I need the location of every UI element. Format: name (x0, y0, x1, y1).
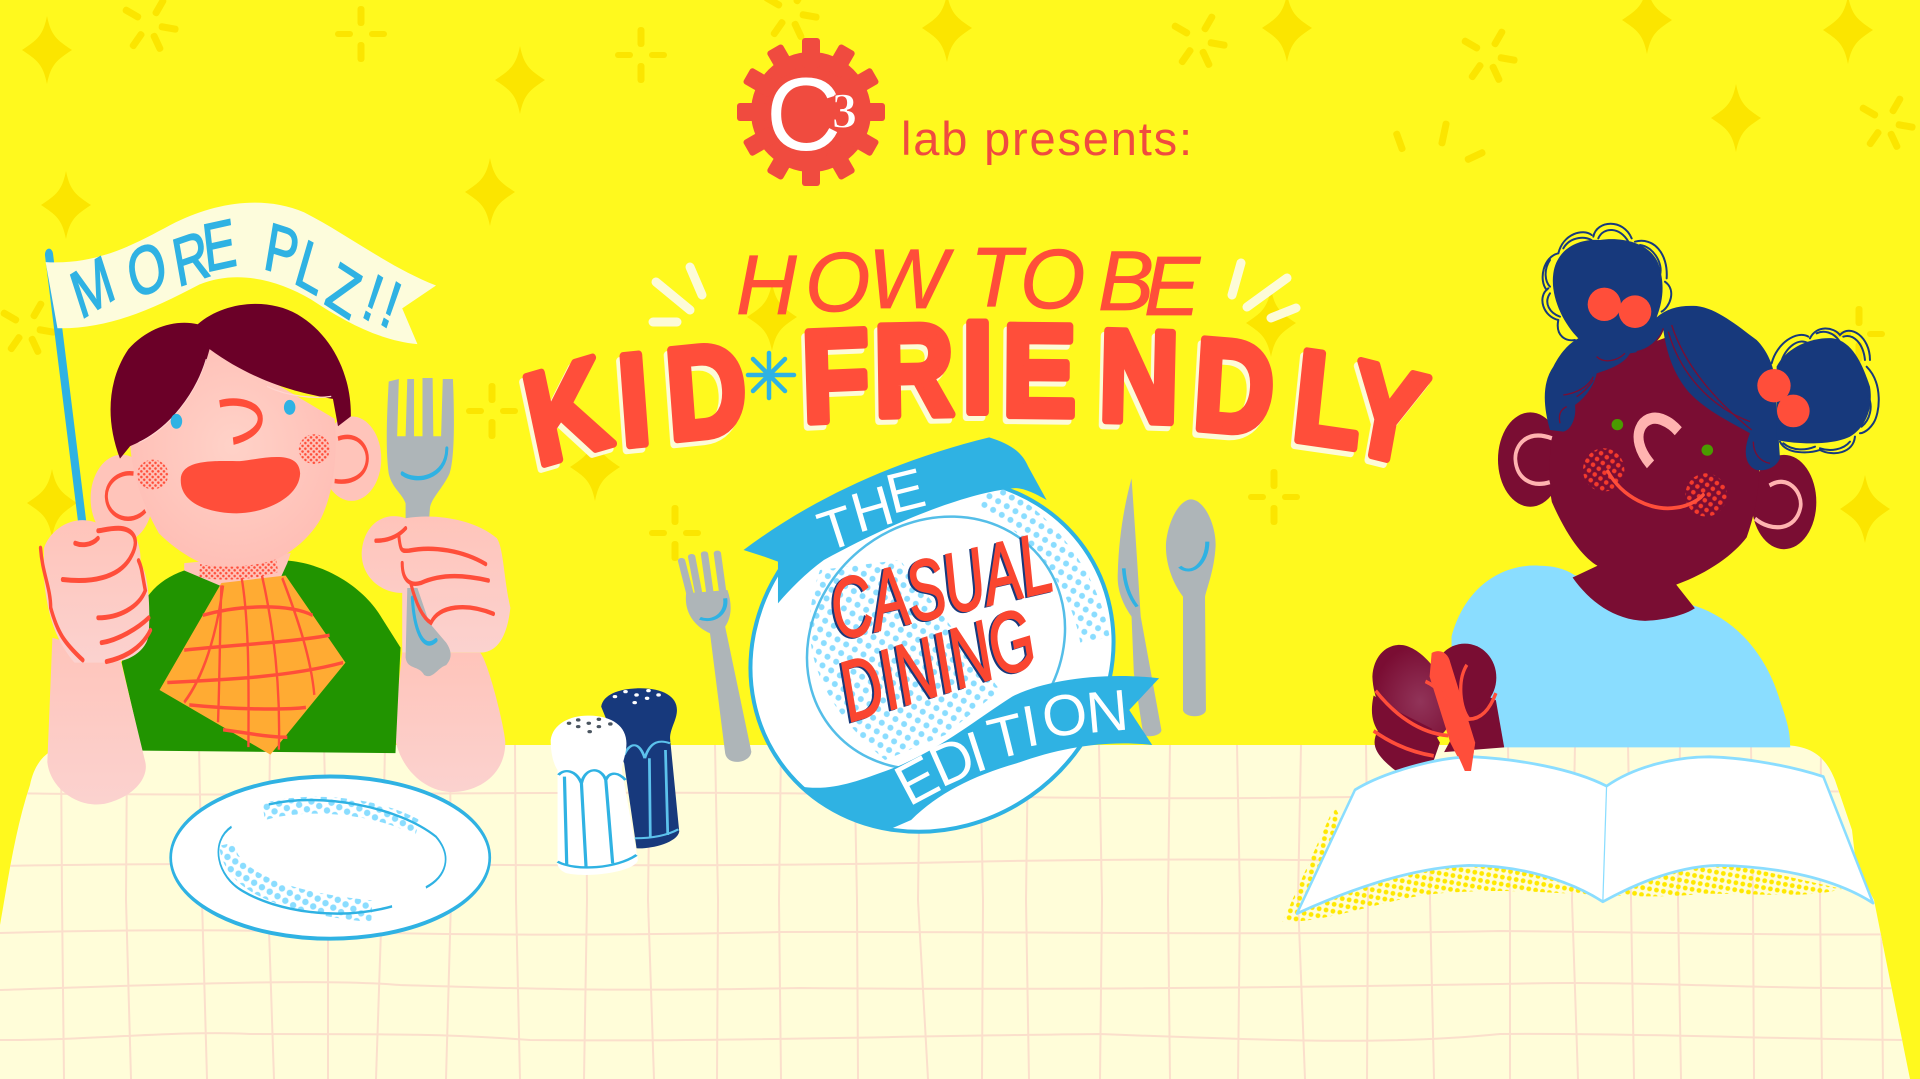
napkin (160, 576, 345, 755)
smile (1608, 471, 1703, 508)
word: casual: CASUAL (821, 516, 1061, 658)
plate inner rim (755, 464, 1117, 822)
open book (1297, 738, 1873, 914)
hand and pencil (1372, 644, 1504, 776)
empty plate (171, 777, 490, 939)
word: friendly: FRIENDLY (800, 295, 1436, 493)
cream ticks left (653, 267, 702, 322)
cheeks (137, 434, 330, 489)
hair and buns (1542, 224, 1879, 470)
shirt (1452, 566, 1790, 747)
right hand (362, 449, 510, 676)
logo letter C: C (766, 57, 841, 173)
halftone shadow (1282, 806, 1842, 922)
background sparkles (0, 0, 1916, 561)
collar dots (199, 566, 277, 573)
eyes (171, 400, 295, 429)
place setting and badge (551, 478, 1216, 875)
hair bows (1588, 288, 1810, 427)
plate halftone (810, 560, 1000, 760)
fork (682, 553, 751, 762)
tablecloth (0, 745, 1920, 1079)
bottom ribbon (801, 676, 1159, 830)
flag pole (49, 255, 84, 541)
boy character (41, 203, 510, 939)
mouth (181, 457, 300, 513)
head (130, 344, 336, 571)
nose (220, 402, 260, 441)
head and neck (1549, 337, 1759, 621)
ribbon text: edition: EDITION (885, 678, 1131, 818)
hair mass and left bun (1545, 239, 1780, 470)
ear lines (106, 437, 367, 519)
heading: how to be: HOW TO BE (736, 230, 1201, 333)
neck (184, 553, 291, 585)
icon: blue asterisk (748, 353, 794, 398)
nose (1639, 418, 1678, 464)
eyes (1612, 419, 1713, 456)
flag text: MORE PLZ!! (62, 198, 409, 344)
heading: kid friendly (513, 295, 1436, 493)
logo: C3 gear (737, 38, 885, 186)
badge plate (681, 407, 1183, 903)
ear lines (1515, 436, 1801, 527)
shirt (122, 561, 401, 753)
salt shaker (551, 716, 638, 875)
hair strands (1559, 325, 1770, 463)
badge title: casual dining (821, 516, 1061, 740)
ears (91, 416, 381, 542)
top ribbon (744, 437, 1047, 603)
lab presents text: lab presents: (901, 112, 1192, 165)
hair (111, 304, 351, 459)
left arm (47, 638, 146, 804)
right arm (394, 653, 505, 792)
knife (1118, 478, 1161, 736)
girl character (1282, 224, 1879, 922)
left bun curls (1542, 224, 1671, 340)
cheeks (1583, 448, 1727, 517)
word: kid: KID (513, 315, 751, 493)
ears (1498, 412, 1816, 549)
cream ticks right (1232, 263, 1296, 318)
flag banner (46, 203, 436, 344)
fork (387, 378, 454, 538)
spoon (1166, 499, 1216, 716)
word: dining: DINING (828, 592, 1046, 740)
right bun curls (1772, 329, 1879, 453)
logo superscript 3: 3 (832, 82, 857, 138)
right bun (1777, 338, 1871, 443)
left hand (41, 520, 150, 663)
pepper shaker (601, 688, 679, 848)
ribbon text: the: THE (810, 455, 931, 563)
